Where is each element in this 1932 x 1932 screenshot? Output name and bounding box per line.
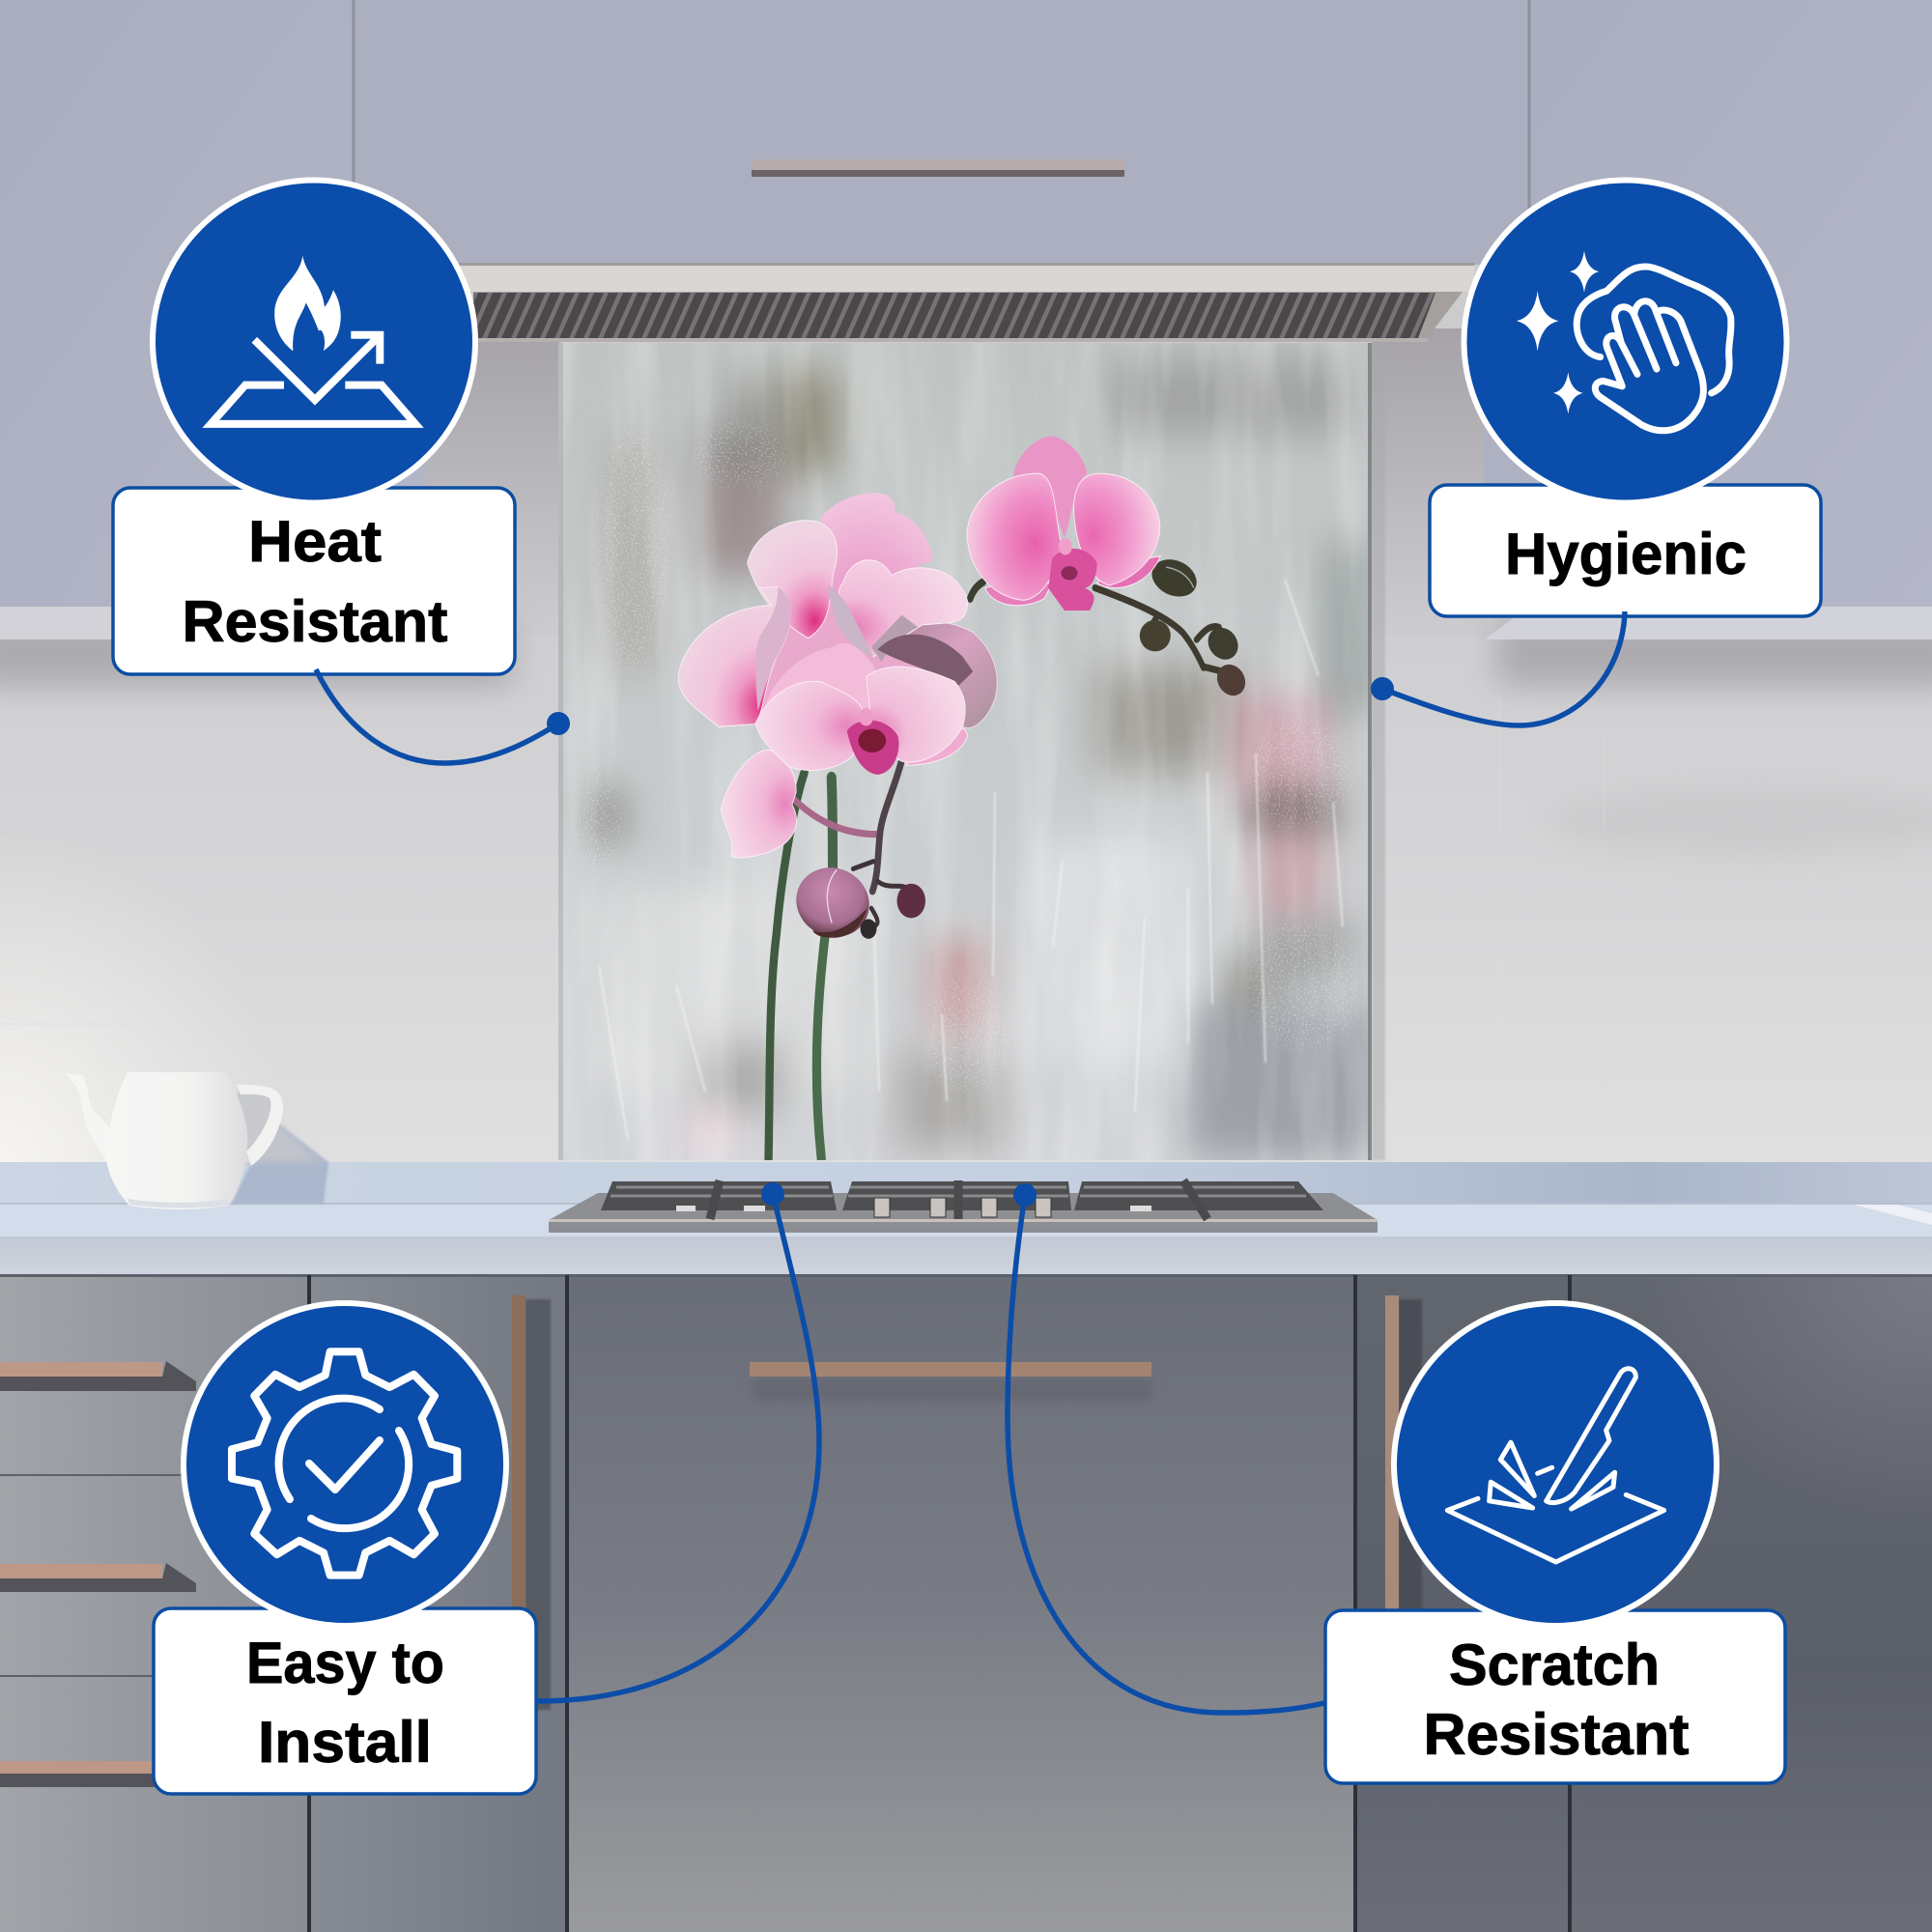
- teapot: [65, 1072, 328, 1209]
- door handles: [512, 1295, 1422, 1710]
- icon: flame rebound: [211, 256, 415, 424]
- label text: Hygienic: [1505, 522, 1747, 586]
- orchid illustration: [678, 436, 1250, 1158]
- back flower: [821, 493, 933, 593]
- icon circle: [1464, 180, 1787, 502]
- icon circle: [153, 180, 475, 502]
- label box: [154, 1608, 536, 1794]
- icon: gear with check: [232, 1351, 457, 1576]
- connector line: [316, 669, 570, 763]
- label box: [1430, 485, 1821, 616]
- callout: Heat Resistant: Resistant: [182, 589, 448, 654]
- top right flower: [985, 582, 1052, 606]
- connector line: [1371, 611, 1625, 725]
- label box: [1325, 1610, 1785, 1783]
- label box: [113, 488, 515, 674]
- callout: Scratch Resistant: [1008, 1183, 1785, 1783]
- palette knife strokes: [599, 580, 1343, 1140]
- panel: orchid glass splashback: [558, 343, 1372, 1160]
- under-shelf shadows: [0, 618, 512, 686]
- base cabinets: [0, 1275, 311, 1932]
- countertop: [0, 1162, 1932, 1205]
- cabinet handle top: [752, 159, 1124, 177]
- label text: Scratch: [1449, 1633, 1660, 1697]
- drawer handles: [0, 1361, 196, 1787]
- faint wall tiles: [0, 696, 1932, 1121]
- upper cabinets: [0, 0, 425, 607]
- panel edges: [558, 343, 563, 1160]
- callout: Hygienic: [1371, 180, 1821, 725]
- connector line: [538, 1182, 819, 1701]
- buds: [792, 554, 1250, 943]
- icon circle: [1394, 1303, 1717, 1626]
- callout: Heat Resistant: [113, 180, 570, 763]
- painted background: [558, 343, 1372, 1160]
- icon: wiping hand with sparkles: [1517, 251, 1731, 431]
- paint speckle: [575, 420, 1362, 1092]
- under-shelf strips: [0, 607, 126, 639]
- icon: knife scratching surface: [1447, 1369, 1664, 1562]
- callout: Scratch Resistant: Resistant: [1424, 1702, 1690, 1767]
- icon circle: [184, 1303, 506, 1626]
- callout: Easy to Install: Install: [258, 1710, 432, 1775]
- flower cluster backing: [761, 601, 925, 713]
- stems: [769, 582, 1223, 1158]
- connector line: [1008, 1183, 1324, 1713]
- label text: Heat: [248, 509, 382, 574]
- range hood: [454, 263, 1474, 292]
- panel shadow on wall: [1372, 343, 1385, 1160]
- callout: Easy to Install: [154, 1182, 819, 1794]
- left flower: [678, 587, 790, 726]
- lower left flower: [721, 750, 797, 858]
- front flower: [765, 643, 875, 709]
- cooktop: [549, 1180, 1378, 1233]
- label text: Easy to: [246, 1631, 444, 1695]
- wall: [0, 580, 1932, 1179]
